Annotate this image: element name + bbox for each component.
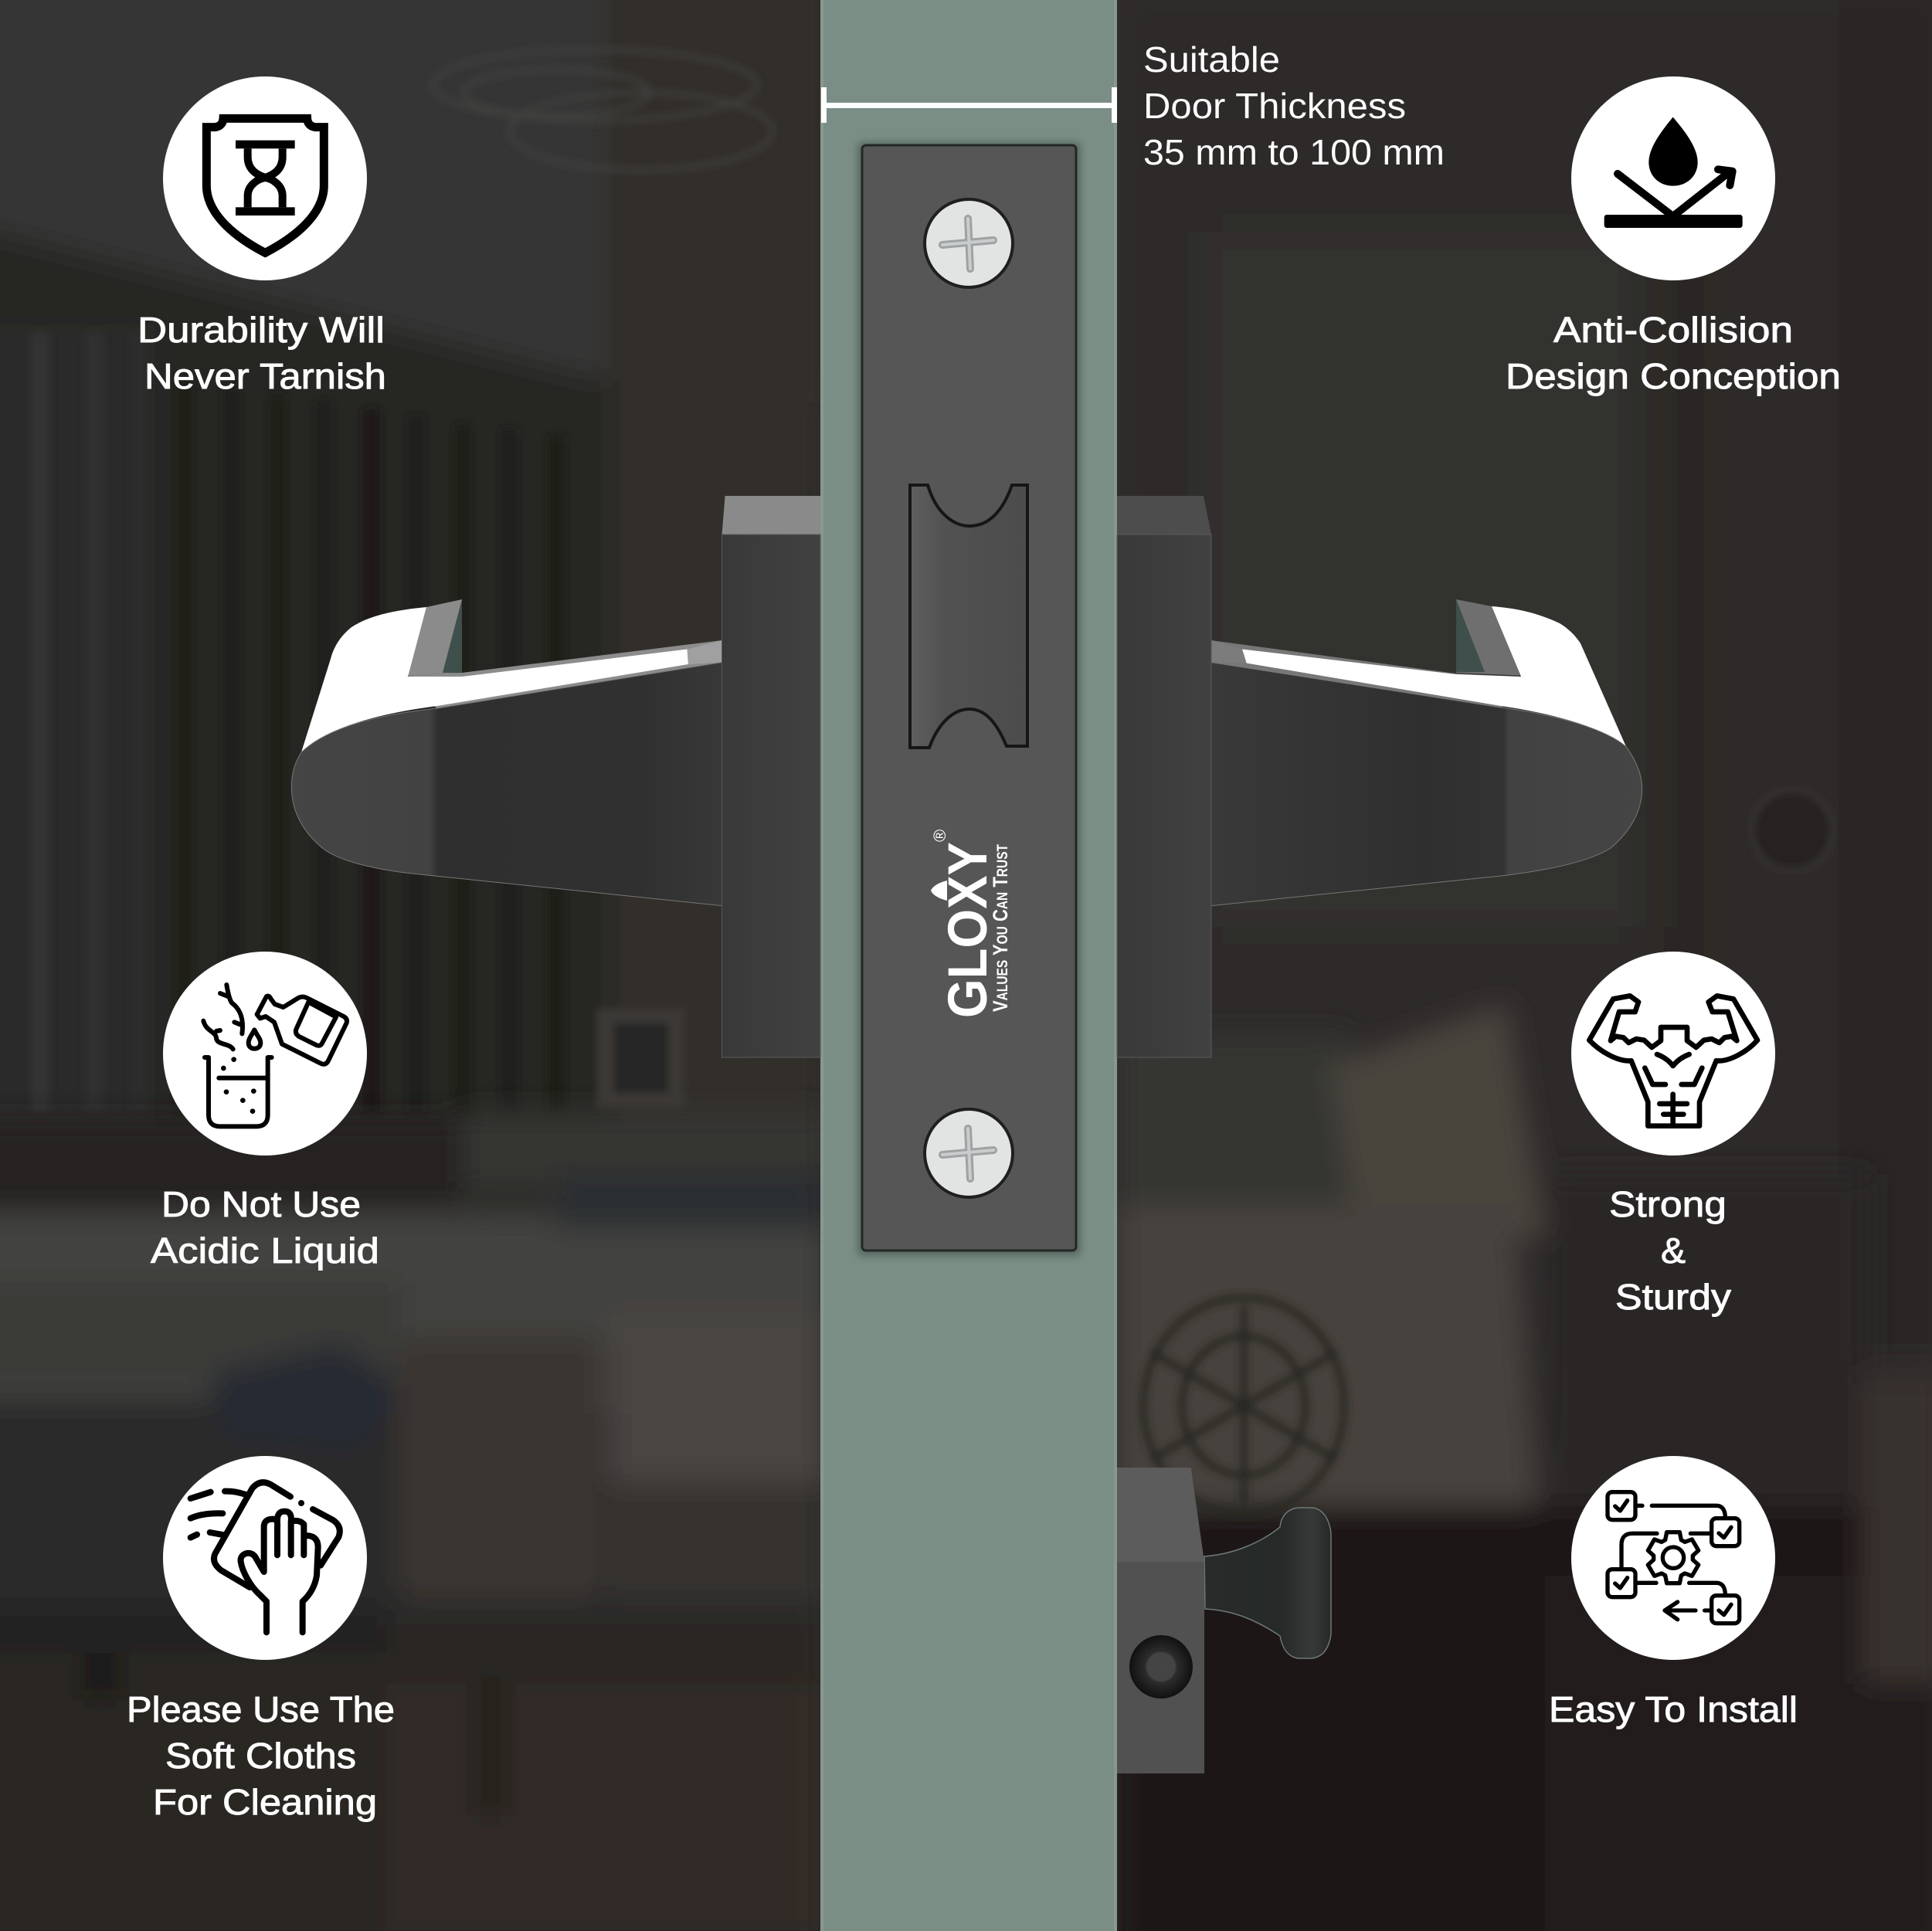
door edge xyxy=(820,0,1117,1931)
label: anti-collision xyxy=(1506,310,1841,396)
feature: easy to install xyxy=(1571,1456,1775,1660)
background: bed and furniture, left side xyxy=(0,1112,827,1931)
background: bed and furniture, right side xyxy=(1117,1004,1932,1931)
right handle backplate xyxy=(1117,496,1211,1057)
label: strong and sturdy: & xyxy=(1661,1230,1686,1271)
label: easy to install: Easy To Install xyxy=(1549,1689,1798,1729)
feature: strong and sturdy xyxy=(1571,952,1775,1156)
icon: workflow with gear and checkboxes xyxy=(1608,1492,1740,1624)
background: blurred bedroom, right side wall xyxy=(1081,0,1932,1931)
privacy bolt housing xyxy=(1117,1468,1204,1773)
feature: anti-collision xyxy=(1571,76,1775,280)
background: picture frame on wall xyxy=(596,1008,685,1108)
background: wall clock xyxy=(1752,790,1832,870)
latch slot xyxy=(910,485,1027,748)
right lever handle xyxy=(1211,599,1642,906)
privacy bolt knob xyxy=(1204,1508,1331,1658)
label: durability xyxy=(138,310,386,396)
icon: water drop and deflection arrow xyxy=(1604,117,1743,228)
left handle backplate xyxy=(722,496,820,1057)
left lever handle xyxy=(291,599,722,906)
door thickness label: 35 mm to 100 mm xyxy=(1143,132,1445,172)
door thickness label xyxy=(1143,39,1445,172)
bottom screw xyxy=(925,1109,1013,1197)
label: strong and sturdy: Sturdy xyxy=(1615,1277,1731,1317)
label: soft cloth cleaning: For Cleaning xyxy=(153,1782,377,1822)
label: strong and sturdy: Strong xyxy=(1609,1184,1727,1224)
label: soft cloth cleaning: Please Use The xyxy=(127,1689,395,1729)
label: anti-collision: Anti-Collision xyxy=(1553,310,1793,350)
icon: bottle pouring acid in beaker xyxy=(203,985,347,1126)
label: durability: Durability Will xyxy=(138,310,385,350)
brand logo: GLOXY: ® xyxy=(930,830,949,842)
door thickness dimension arrow xyxy=(821,87,1117,123)
brand logo: GLOXY: GLOXY xyxy=(938,842,999,1018)
label: soft cloth cleaning xyxy=(127,1689,395,1822)
label: durability: Never Tarnish xyxy=(144,356,386,396)
background: dark lattice bed throw xyxy=(1143,1298,1344,1514)
icon: shield with hourglass xyxy=(206,118,324,253)
feature: no acidic liquid xyxy=(163,952,367,1156)
feature: soft cloth cleaning xyxy=(163,1456,367,1660)
label: strong and sturdy xyxy=(1609,1184,1731,1317)
top screw xyxy=(925,199,1013,287)
icon: hand wiping with cloth xyxy=(191,1482,340,1632)
background: ceiling light fixture xyxy=(433,49,772,170)
label: no acidic liquid: Acidic Liquid xyxy=(151,1230,379,1271)
background: blurred bedroom, left side xyxy=(0,0,834,1931)
door thickness label: Door Thickness xyxy=(1143,86,1406,126)
feature: durability xyxy=(163,76,367,280)
icon: muscular torso xyxy=(1589,996,1757,1126)
background: curtain folds xyxy=(31,332,564,1112)
label: soft cloth cleaning: Soft Cloths xyxy=(165,1736,356,1776)
strike plate xyxy=(857,142,1081,1256)
label: anti-collision: Design Conception xyxy=(1506,356,1841,396)
door thickness label: Suitable xyxy=(1143,39,1280,80)
label: no acidic liquid: Do Not Use xyxy=(161,1184,361,1224)
brand logo: GLOXY: Values You Can Trust xyxy=(989,844,1012,1012)
label: no acidic liquid xyxy=(151,1184,379,1271)
